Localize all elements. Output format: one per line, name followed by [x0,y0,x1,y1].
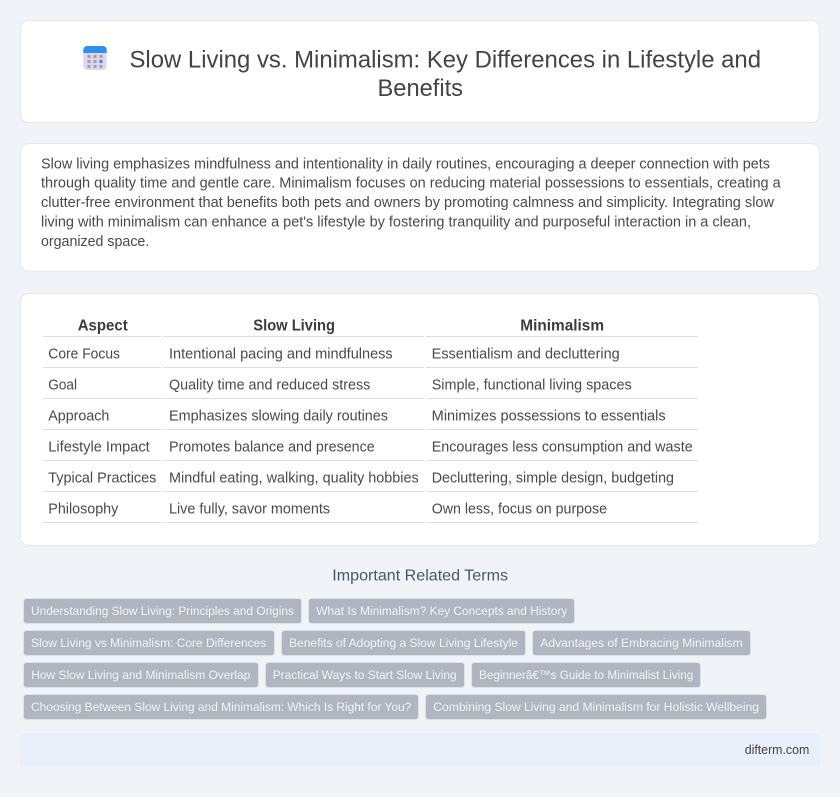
table row: core focus: Essentialism and decluttering [432,346,620,362]
footer: difterm.com [745,742,809,757]
tag: overlap [24,662,258,688]
table row: approach: Approach [48,408,109,424]
tag: beginner guide [472,662,700,688]
table header row: Slow Living [253,318,335,335]
footer [20,733,820,767]
panel: related term tags [24,598,766,720]
table row: lifestyle impact [43,439,698,461]
table header row: Minimalism [520,318,604,335]
title: Slow Living vs. Minimalism: Key Differences in Lifestyle and [130,46,761,73]
table row: philosophy: Philosophy [48,501,119,517]
paragraph: clutter-free environment that benefits both pets and owners by promoting calmness and simplicity. Integrating slow [41,195,774,211]
tag: choosing between: Choosing Between Slow Living and Minimalism: Which Is Right for You? [31,700,411,714]
table row: goal [43,377,698,399]
table row: approach: Minimizes possessions to essentials [432,408,666,424]
tag: combining [426,694,766,720]
tag: choosing between [24,694,418,720]
tag: what is minimalism: What Is Minimalism? Key Concepts and History [316,604,568,618]
tag: benefits of slow living [282,630,526,656]
table row: typical practices: Typical Practices [48,470,156,486]
tag: core differences: Slow Living vs Minimalism: Core Differences [31,636,266,650]
table row: core focus: Intentional pacing and mindfulness [169,346,393,362]
title [130,46,761,102]
panel: introduction text [20,144,820,271]
table row: philosophy: Own less, focus on purpose [432,501,607,517]
paragraph: through quality time and gentle care. Minimalism focuses on reducing material possessions to essentials, creating a [41,176,782,192]
paragraph: organized space. [41,234,149,250]
paragraph: living with minimalism can enhance a pet's lifestyle by fostering tranquility and purposeful interaction in a clean, [41,215,751,231]
panel: comparison table [20,294,820,546]
tag: combining: Combining Slow Living and Minimalism for Holistic Wellbeing [433,700,759,714]
table header row [43,318,698,337]
table row: philosophy [43,501,698,523]
icon: calendar [83,46,107,70]
tag: overlap: How Slow Living and Minimalism Overlap [31,668,250,682]
table row: goal: Quality time and reduced stress [169,377,370,393]
tag: practical ways: Practical Ways to Start Slow Living [273,668,457,682]
table row: core focus: Core Focus [48,346,120,362]
table row: lifestyle impact: Lifestyle Impact [48,439,150,455]
paragraph: Slow living emphasizes mindfulness and intentionality in daily routines, encouraging a deeper connection with pets [41,156,770,172]
table row: philosophy: Live fully, savor moments [169,501,330,517]
table row: approach: Emphasizes slowing daily routines [169,408,388,424]
table row: typical practices: Decluttering, simple design, budgeting [432,470,674,486]
title: Benefits [378,75,463,102]
tag: advantages of minimalism: Advantages of Embracing Minimalism [540,636,743,650]
tag: understanding slow living: Understanding Slow Living: Principles and Origins [31,604,294,618]
table row: goal: Simple, functional living spaces [432,377,632,393]
heading: important related terms: Important Related Terms [332,568,508,585]
table row: lifestyle impact: Promotes balance and presence [169,439,375,455]
tag: what is minimalism [308,598,574,624]
tag: benefits of slow living: Benefits of Adopting a Slow Living Lifestyle [289,636,518,650]
tag: practical ways [266,662,464,688]
tag: beginner guide: Beginnerâ€™s Guide to Minimalist Living [479,668,693,682]
tag: core differences [24,630,274,656]
table row: lifestyle impact: Encourages less consumption and waste [432,439,693,455]
table row: core focus [43,346,698,368]
tag: advantages of minimalism [532,630,750,656]
panel: header [20,20,820,122]
table row: typical practices: Mindful eating, walking, quality hobbies [169,470,419,486]
paragraph [41,156,782,250]
table header row: Aspect [78,318,128,335]
table row: goal: Goal [48,377,77,393]
tag: understanding slow living [24,598,302,624]
table row: approach [43,408,698,430]
table row: typical practices [43,470,698,492]
